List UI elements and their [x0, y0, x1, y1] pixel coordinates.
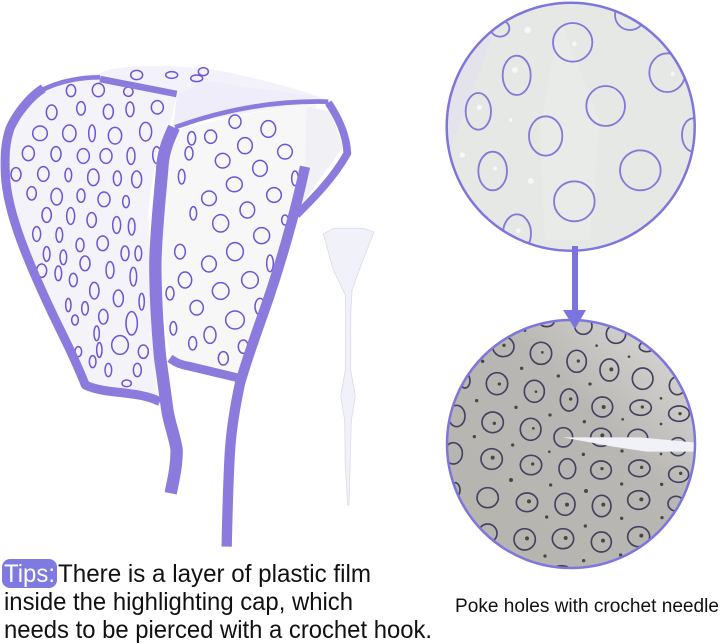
magnified circle: cap before piercing	[440, 0, 705, 252]
tips text: inside the highlighting cap, which	[4, 588, 353, 616]
magnified circle: cap after piercing	[444, 317, 697, 571]
tips text	[4, 560, 432, 644]
arrow between circles	[563, 246, 586, 329]
caption: Poke holes with crochet needle	[455, 596, 719, 617]
crochet needle	[563, 437, 697, 452]
tips text: needs to be pierced with a crochet hook.	[4, 616, 432, 644]
tips text: There is a layer of plastic film	[58, 560, 371, 588]
illustration: highlighting cap	[3, 66, 347, 547]
tips badge: Tips:	[4, 560, 55, 588]
cap trim bands	[5, 77, 347, 547]
cap dot pattern	[11, 68, 298, 387]
illustration: applicator tool	[323, 228, 374, 505]
